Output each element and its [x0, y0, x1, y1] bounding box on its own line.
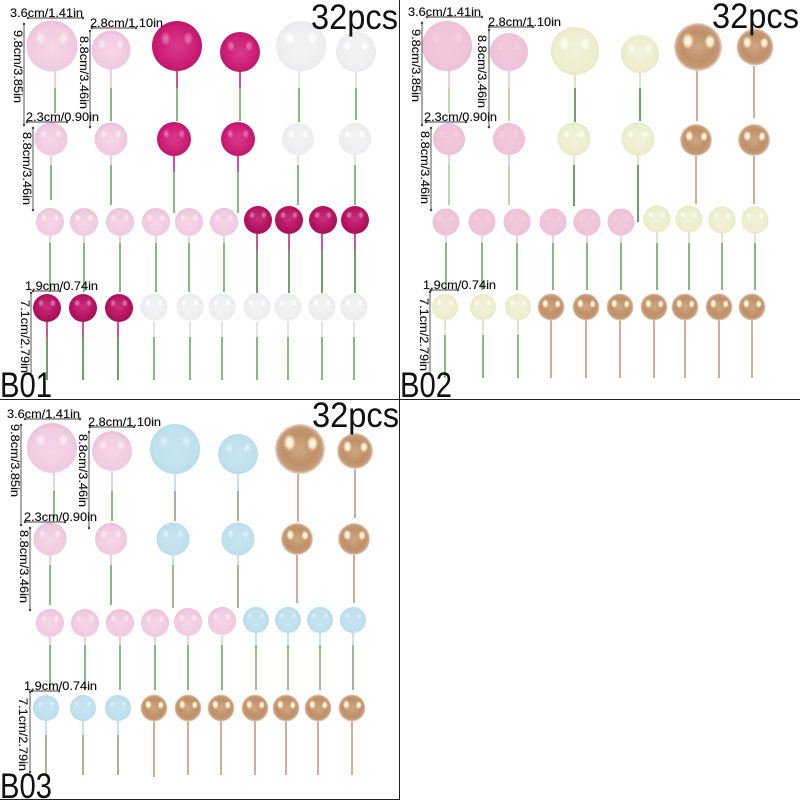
- B01 dimension labels: 1.9cm/0.74in: [25, 279, 98, 293]
- B02 dimension labels: 2.8cm/1.10in: [488, 15, 561, 29]
- B03 quantity: 32pcs: [312, 396, 399, 435]
- B02 dimension labels: [408, 5, 561, 374]
- B02 row 1 picks: [422, 21, 774, 122]
- B01 dimension labels: 8.8cm/3.46in: [20, 132, 34, 205]
- B01 dimension labels: 9.8cm/3.85in: [11, 30, 25, 103]
- B03 dimension labels: 2.3cm/0.90in: [24, 510, 97, 524]
- B03 dimension labels: 1.9cm/0.74in: [24, 679, 97, 693]
- B01 dimension labels: 7.1cm/2.79in: [18, 300, 32, 373]
- B01 dimension labels: 2.8cm/1.10in: [90, 16, 163, 30]
- B01 dimension labels: 2.3cm/0.90in: [26, 110, 99, 124]
- B03 dimension labels: 3.6cm/1.41in: [7, 407, 80, 421]
- B02 dimension labels: 3.6cm/1.41in: [408, 5, 481, 19]
- panel: B03: [0, 396, 399, 800]
- B01 row 1 picks: [26, 20, 376, 122]
- B02 dimension labels: 8.8cm/3.46in: [418, 131, 432, 204]
- B02 label: B02: [400, 366, 452, 405]
- B03 dimension labels: 7.1cm/2.79in: [16, 698, 30, 771]
- B02 dimension labels: 1.9cm/0.74in: [423, 278, 496, 292]
- B03 row 4 picks: [33, 694, 366, 777]
- B02 row 4 picks: [432, 294, 766, 378]
- B02 dimension labels: 2.3cm/0.90in: [424, 110, 497, 124]
- B03 row 1 picks: [27, 423, 373, 522]
- B02 row 3 picks: [432, 206, 768, 290]
- B01 dimension labels: 8.8cm/3.46in: [77, 36, 91, 109]
- B02 dimension labels: 7.1cm/2.79in: [417, 298, 431, 371]
- B02 row 2 picks: [433, 122, 770, 222]
- B01 dimension labels: [10, 6, 163, 375]
- B02 dimension labels: 9.8cm/3.85in: [409, 29, 423, 102]
- B03 dimension labels: [7, 407, 161, 772]
- B03 dimension labels: 2.8cm/1.10in: [88, 415, 161, 429]
- B03 row 2 picks: [34, 522, 370, 608]
- B01 dimension labels: 3.6cm/1.41in: [10, 6, 83, 20]
- B03 dimension labels: 8.8cm/3.46in: [76, 434, 90, 507]
- B03 row 3 picks: [36, 607, 366, 690]
- B01 row 2 picks: [34, 122, 371, 213]
- panel: B02: [400, 0, 799, 405]
- B01 label: B01: [0, 366, 52, 405]
- B01 row 3 picks: [36, 206, 369, 293]
- panel: B01: [0, 0, 398, 405]
- B03 dimension labels: 9.8cm/3.85in: [8, 424, 22, 497]
- B03 dimension labels: 8.8cm/3.46in: [17, 530, 31, 603]
- B02 dimension labels: 8.8cm/3.46in: [475, 35, 489, 108]
- B01 row 4 picks: [33, 294, 368, 380]
